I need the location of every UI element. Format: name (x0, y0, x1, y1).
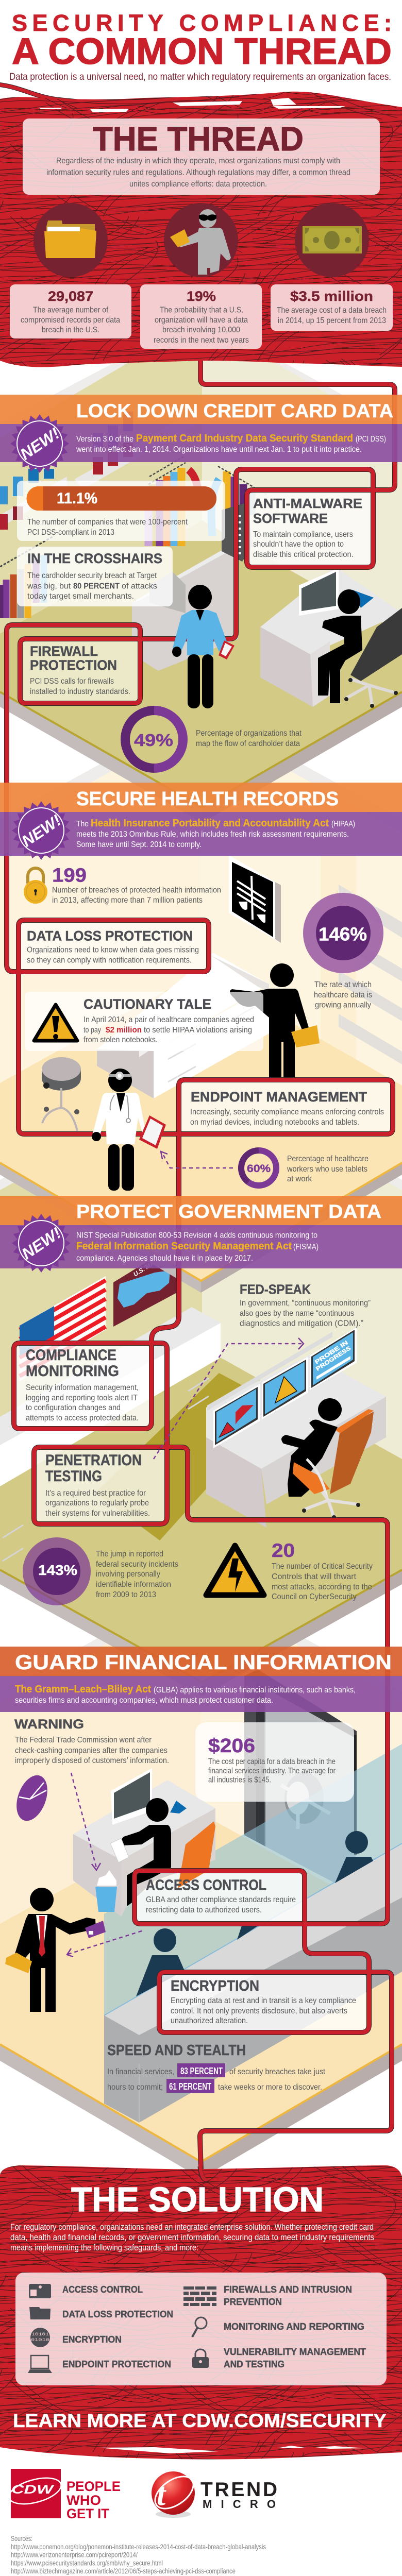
stat: 146 percent circle: The rate at which (314, 980, 372, 989)
section banner: guard financial information (0, 1647, 402, 1712)
label: endpoint protection: ENDPOINT PROTECTION (62, 2359, 171, 2369)
text: in the crosshairs: 80 PERCENT (73, 582, 120, 591)
monitor: probe in progress: PROGRESS (315, 1345, 352, 1372)
text: data loss protection (27, 928, 199, 964)
text: access control (146, 1877, 296, 1914)
stat card: records per breach: 29,087 (48, 289, 93, 304)
text: anti-malware software: shouldn’t have the option to (253, 540, 344, 549)
text: compliance monitoring: MONITORING (26, 1363, 119, 1380)
text: cautionary tale: CAUTIONARY TALE (83, 996, 211, 1012)
icon: gold lock (24, 868, 47, 904)
label: monitoring: MONITORING AND REPORTING (224, 2321, 364, 2332)
vault (244, 1669, 357, 1883)
text: penetration testing: It’s a required best practice for (45, 1489, 146, 1498)
label: firewalls (224, 2284, 352, 2307)
text: compliance monitoring: attempts to access protected data. (26, 1414, 139, 1422)
text: access control: ACCESS CONTROL (146, 1877, 266, 1894)
title (12, 10, 392, 72)
doctor with tablet (92, 1069, 166, 1191)
text: tablets at work: workers who use tablets (287, 1165, 367, 1174)
panel: the thread (23, 118, 380, 195)
sources (11, 2535, 334, 2576)
chart: 49 percent donut: 49% (134, 731, 173, 750)
chart: 49 percent donut (125, 710, 183, 768)
regulation text: securities firms and accounting companies, which must protect customer data. (15, 1696, 273, 1705)
title: A COMMON THREAD (12, 31, 392, 72)
text: anti-malware software: To maintain compliance, users (253, 530, 353, 539)
seated employee (110, 1798, 171, 1906)
text: penetration testing: their systems for vulnerabilities. (45, 1509, 150, 1518)
text: anti-malware software: ANTI-MALWARE (253, 496, 362, 511)
monitor: probe in progress (310, 1327, 357, 1390)
stat: 20 critical controls: Controls that will thwart (272, 1572, 357, 1581)
the thread: red rope through all sections (7, 358, 395, 2179)
logo: Trend Micro: t (157, 2477, 166, 2512)
regulation text: The Gramm–Leach–Bliley Act (15, 1684, 151, 1695)
stat card: cost of breach: $3.5 million (290, 289, 373, 304)
room: financial background (0, 1581, 402, 2178)
regulation text: (HIPAA) (331, 820, 355, 828)
text: compliance monitoring: Security information management, (26, 1383, 139, 1392)
seated analyst and orange chair (281, 1398, 374, 1519)
text: penetration testing (45, 1452, 150, 1518)
regulation text: Federal Information Security Management Act (76, 1241, 292, 1252)
text: firewall protection: FIREWALL (30, 643, 98, 659)
badge: new (12, 1214, 71, 1273)
text: federal incidents: involving personally (96, 1570, 160, 1579)
office desk and worker (260, 567, 402, 708)
icon: brick wall (183, 2286, 216, 2306)
stat: 199 breaches: 199 (52, 865, 87, 886)
text: compliance monitoring (26, 1347, 139, 1422)
label: firewalls: PREVENTION (224, 2297, 282, 2307)
text: firewall protection: PROTECTION (30, 657, 117, 673)
icon: dollar bill in circle (295, 203, 369, 277)
text: cardholder data map (196, 729, 301, 748)
stat card: breach probability: records in the next two years (154, 336, 249, 345)
text: solution intro: means implementing the following safeguards, and more: (10, 2243, 198, 2252)
label: encryption: ENCRYPTION (62, 2334, 122, 2345)
regulation text: Version 3.0 of the (76, 435, 133, 444)
stat: 20 critical controls: most attacks, according to the (272, 1583, 372, 1591)
arrow: warning to trash (71, 1773, 100, 1870)
top red thread mass (0, 84, 402, 367)
regulation text (76, 1231, 319, 1263)
arrow: donut to tablet (161, 1151, 233, 1168)
text: federal incidents: federal security incidents (96, 1560, 178, 1569)
regulation text: went into effect Jan. 1, 2014. Organizations have until next Jan. 1 to put it into practice. (76, 445, 362, 454)
map of the US (113, 1252, 178, 1327)
stat: 20 critical controls: 20 (272, 1540, 295, 1561)
regulation text: (FISMA) (293, 1243, 319, 1251)
monitor: lightning warning (262, 1357, 308, 1419)
stat: 199 breaches (52, 865, 221, 905)
text: warning: WARNING (14, 1717, 84, 1732)
icon: access card (29, 2284, 51, 2298)
stat: 146 percent circle: healthcare data is (314, 991, 372, 999)
logo: Trend Micro: MICRO (203, 2498, 276, 2511)
stat: 206 dollars per capita: all industries is $145. (208, 1775, 271, 1785)
badge: new: NEW! (19, 1224, 64, 1263)
regulation text: Payment Card Industry Data Security Standard (136, 433, 353, 444)
text: in the crosshairs: of attacks (122, 582, 157, 591)
text: endpoint management: on myriad devices, including notebooks and tablets. (190, 1118, 359, 1127)
text: compliance monitoring: logging and reporting tools alert IT (26, 1394, 138, 1402)
room: credit card background (0, 317, 402, 823)
stat: 143 percent circle: 143% (38, 1562, 77, 1578)
text: access control: restricting data to authorized users. (146, 1906, 262, 1914)
text: tablets at work: at work (287, 1175, 312, 1183)
stat: 20 critical controls (272, 1540, 373, 1601)
stat card: records per breach: breach in the U.S. (42, 326, 99, 334)
text: data loss protection: DATA LOSS PROTECTION (27, 928, 193, 944)
sources: https://www.pcisecuritystandards.org/smb/why_secure.html (11, 2559, 163, 2567)
heading: SECURE HEALTH RECORDS (76, 788, 339, 810)
stat card: cost of breach: The average cost of a data breach (277, 306, 387, 315)
badge: new: NEW! (17, 424, 63, 463)
logo: CDW: GET IT (66, 2506, 109, 2521)
panel: safeguards list (15, 2273, 387, 2385)
tag: 61 percent (166, 2079, 214, 2093)
person in blue shirt with tablet (172, 585, 234, 708)
logo: Trend Micro: TREND (200, 2479, 277, 2501)
regulation text: (PCI DSS) (356, 435, 386, 444)
icon: folder in circle (34, 203, 108, 277)
sources: http://www.ponemon.org/blog/ponemon-institute-releases-2014-cost-of-data-breach-global-analysis (11, 2543, 266, 2551)
label: data loss protection: DATA LOSS PROTECTION (62, 2309, 173, 2319)
monitor: probe in progress: PROBE IN (314, 1340, 349, 1366)
icon: binary circle: 01010 (31, 2338, 49, 2343)
text: anti-malware software: SOFTWARE (253, 511, 328, 526)
section: financial office scene (11, 1768, 215, 1957)
text: warning (14, 1717, 169, 1765)
stat: 146 percent circle: growing annually (315, 1001, 371, 1010)
intro text (46, 157, 350, 189)
label: vulnerability: VULNERABILITY MANAGEMENT (224, 2347, 366, 2357)
text: speed and stealth: In financial services, (107, 2067, 174, 2076)
regulation text (76, 818, 355, 849)
label: vulnerability (224, 2347, 366, 2369)
intro text: information security rules and regulations. Although regulations may differ, a common thread (46, 168, 350, 177)
rack: lower left (0, 555, 44, 618)
label: firewalls: FIREWALLS AND INTRUSION (224, 2284, 352, 2295)
badge: new: NEW! (19, 811, 64, 850)
text: encryption (171, 1978, 356, 2025)
room: health background (0, 708, 402, 1293)
silhouette: people behind glass (136, 1831, 373, 1996)
regulation text: meets the 2013 Omnibus Rule, which includes fresh risk assessment requirements. (76, 830, 349, 839)
text: encryption: unauthorized alteration. (171, 2016, 248, 2025)
sources: http://www.verizonenterprise.com/pcireport/2014/ (11, 2551, 138, 2559)
heading: PROTECT GOVERNMENT DATA (76, 1201, 381, 1222)
x-ray on wall (229, 855, 281, 943)
heading: the solution: THE SOLUTION (71, 2180, 324, 2219)
arrow: to badge (67, 1931, 142, 1957)
stat: 206 dollars per capita: The cost per capita for a data breach in the (208, 1757, 336, 1766)
label: vulnerability: AND TESTING (224, 2359, 284, 2369)
rack: center (148, 468, 252, 546)
stat card: breach probability: The probability that a U.S. (160, 306, 243, 314)
text: in the crosshairs (27, 551, 162, 601)
text: in the crosshairs: IN THE CROSSHAIRS (27, 551, 162, 566)
text: tablets at work (287, 1155, 368, 1183)
chart: 60 percent donut (241, 1150, 276, 1185)
text: firewall protection: PCI DSS calls for firewalls (30, 677, 114, 686)
text: encryption: ENCRYPTION (171, 1978, 259, 1994)
icon: folder (29, 2307, 51, 2319)
text: fed-speak: also goes by the name “continuous (240, 1309, 354, 1318)
icon: magnifier (192, 2317, 207, 2337)
stat: 143 percent circle (23, 1537, 91, 1605)
stat: 206 dollars per capita: $206 (208, 1735, 255, 1757)
clock (11, 1771, 53, 1825)
logo: CDW: CDW (11, 2483, 55, 2497)
regulation text: Health Insurance Portability and Accountability Act (91, 818, 329, 829)
stat: 11.1 percent compliant bar: PCI DSS-compliant in 2013 (27, 528, 114, 537)
title: SECURITY COMPLIANCE: (12, 10, 392, 36)
icon: binary circle (30, 2328, 50, 2347)
badge: new (12, 801, 71, 860)
text: penetration testing: TESTING (45, 1468, 102, 1485)
logo: CDW (6, 2469, 121, 2521)
stat card: records per breach: compromised records per data (21, 316, 120, 325)
trash can (95, 1870, 117, 1912)
stat: 11.1 percent compliant bar: 11.1% (57, 490, 97, 507)
stat card: breach probability (140, 284, 262, 349)
section banner: protect government data (0, 1196, 402, 1268)
text: encryption: control. It not only prevents disclosure, but also averts (171, 2007, 347, 2015)
regulation text: (GLBA) applies to various financial institutions, such as banks, (154, 1686, 356, 1694)
regulation text: compliance. Agencies should have it in place by 2017. (76, 1254, 253, 1263)
icon: warning triangle (34, 1005, 77, 1041)
text: warning: improperly disposed of customers’ information. (15, 1756, 169, 1765)
text: firewall protection: installed to industry standards. (30, 687, 130, 696)
logo: CDW: PEOPLE (66, 2479, 121, 2494)
icon: binary circle: 10101 (31, 2332, 49, 2337)
bottom red thread mass (0, 2164, 402, 2460)
flag (20, 1276, 106, 1381)
text: cautionary tale: to settle HIPAA violations arising (144, 1026, 252, 1035)
text: cautionary tale (83, 996, 254, 1044)
text: solution intro (10, 2222, 374, 2252)
text: cardholder data map: map the flow of cardholder data (196, 739, 300, 748)
intro text: Regardless of the industry in which they operate, most organizations must comply with (56, 157, 340, 165)
businessman with badge and folder (5, 1888, 106, 2012)
stat: 199 breaches: Number of breaches of protected health information (52, 886, 221, 894)
translucent text panels (16, 481, 391, 2030)
text: access control: GLBA and other compliance standards require (146, 1895, 296, 1904)
stat: 206 dollars per capita: financial services industry. The average for (208, 1767, 336, 1775)
sources: http://www.biztechmagazine.com/article/2012/06/5-steps-achieving-pci-dss-compliance (11, 2567, 236, 2575)
icon: padlock (192, 2349, 209, 2368)
icon: laptop (28, 2355, 52, 2373)
text: warning: check-cashing companies after the companies (15, 1747, 167, 1755)
badge: new (10, 414, 69, 473)
stat card: cost of breach: in 2014, up 15 percent from 2013 (278, 316, 386, 325)
text: firewall protection (30, 643, 130, 696)
icon: lightning warning triangle (206, 1546, 264, 1595)
text: data loss protection: so they can comply with notification requirements. (27, 956, 192, 964)
regulation text: NIST Special Publication 800-53 Revision 4 adds continuous monitoring to (76, 1231, 317, 1240)
stat card: breach probability: breach involving 10,000 (162, 326, 240, 334)
stat: 20 critical controls: Council on CyberSecurity (272, 1592, 357, 1601)
stat: 146 percent circle (303, 893, 383, 1010)
orange chair (178, 1821, 215, 1888)
section banner: secure health records (0, 783, 402, 856)
text: cautionary tale: In April 2014, a pair of healthcare companies agreed (83, 1015, 254, 1024)
text: endpoint management: ENDPOINT MANAGEMENT (191, 1089, 367, 1105)
label: access control: ACCESS CONTROL (62, 2284, 143, 2295)
text: fed-speak: diagnostics and mitigation (CDM).” (240, 1319, 363, 1328)
text: speed and stealth (107, 2042, 325, 2093)
tag: 83 percent (177, 2063, 225, 2077)
heading: GUARD FINANCIAL INFORMATION (15, 1651, 392, 1674)
text: federal incidents: identifiable information (96, 1580, 171, 1589)
tag: 61 percent: 61 PERCENT (169, 2081, 211, 2092)
text: speed and stealth: SPEED AND STEALTH (107, 2042, 246, 2059)
text: federal incidents: from 2009 to 2013 (96, 1590, 156, 1599)
text: anti-malware software: disable this critical protection. (253, 550, 354, 559)
regulation text: Some have until Sept. 2014 to comply. (76, 840, 202, 849)
stat card: records per breach: The average number of (33, 306, 108, 314)
room: government background (0, 1069, 402, 1696)
heading: LOCK DOWN CREDIT CARD DATA (76, 400, 393, 421)
text: anti-malware software (253, 496, 362, 559)
text: in the crosshairs: was big, but (27, 582, 71, 591)
text: compliance monitoring: COMPLIANCE (26, 1347, 116, 1364)
desk with computer (73, 1768, 215, 1917)
chart: 60 percent donut: 60% (247, 1163, 271, 1175)
text: endpoint management: Increasingly, security compliance means enforcing controls (190, 1108, 384, 1116)
desk with three monitors (206, 1327, 386, 1528)
clothing racks (0, 456, 266, 618)
arrow: penetration testing to monitors (154, 1338, 304, 1459)
text: in the crosshairs: The cardholder security breach at Target (27, 571, 157, 580)
text: encryption: Encrypting data at rest and in transit is a key compliance (171, 1996, 356, 2005)
map of the US: U.S. MAP (132, 1257, 160, 1278)
regulation text (76, 433, 386, 454)
person holding folder (230, 963, 320, 1082)
intro text: unites compliance efforts: data protection. (129, 180, 267, 189)
regulation text (15, 1684, 356, 1705)
call to action: LEARN MORE AT CDW.COM/SECURITY (13, 2410, 387, 2431)
stat card: cost of breach (271, 284, 393, 331)
text: speed and stealth: take weeks or more to discover. (218, 2083, 322, 2092)
regulation text: The (76, 820, 89, 828)
sources: Sources: (11, 2535, 32, 2543)
stat: 146 percent circle: 146% (319, 923, 367, 945)
stat card: records per breach (10, 284, 131, 338)
icon: masked thief in circle (164, 203, 238, 277)
text: tablets at work: Percentage of healthcare (287, 1155, 368, 1163)
store shelves with product bars (0, 407, 201, 530)
text: fed-speak: FED-SPEAK (240, 1282, 311, 1297)
tag: 83 percent: 83 PERCENT (180, 2066, 223, 2076)
stool (42, 1057, 81, 1131)
heading: the thread: THE THREAD (93, 120, 304, 158)
text: cautionary tale: $2 million (106, 1026, 142, 1035)
text: speed and stealth: hours to commit; (107, 2083, 163, 2092)
monitor: warning and house (213, 1384, 260, 1448)
text: warning: The Federal Trade Commission went after (15, 1736, 152, 1744)
text: data loss protection: Organizations need to know when data goes missing (27, 946, 199, 954)
stat: 199 breaches: in 2013, affecting more than 7 million patients (52, 896, 203, 905)
text: cautionary tale: from stolen notebooks. (83, 1036, 158, 1044)
stat: 20 critical controls: The number of Critical Security (272, 1562, 373, 1571)
section banner: lock down credit card data (0, 395, 402, 462)
stat: 206 dollars per capita (208, 1735, 336, 1785)
text: federal incidents (96, 1550, 178, 1599)
text: cautionary tale: to pay (83, 1026, 101, 1035)
text: cardholder data map: Percentage of organizations that (196, 729, 301, 738)
text: penetration testing: organizations to regularly probe (45, 1499, 149, 1507)
text: federal incidents: The jump in reported (96, 1550, 163, 1558)
text: fed-speak (240, 1282, 371, 1328)
cabinet: exam room (97, 953, 269, 1098)
logo: Trend Micro (149, 2470, 277, 2518)
text: fed-speak: In government, “continuous monitoring” (240, 1299, 371, 1308)
stat: 11.1 percent compliant bar: The number of companies that were 100-percent (27, 518, 188, 527)
stat card: breach probability: 19% (187, 289, 216, 304)
text: in the crosshairs: today target small merchants. (27, 592, 134, 601)
logo: CDW: WHO (66, 2493, 101, 2508)
text: compliance monitoring: to configuration changes and (26, 1403, 121, 1412)
counter and register (132, 502, 253, 671)
cabinet: long white counter (0, 1307, 221, 1561)
text: speed and stealth: of security breaches take just (229, 2067, 325, 2076)
glass wall (104, 1744, 402, 2015)
stat card: breach probability: organization will have a data (155, 316, 248, 325)
text: endpoint management (190, 1089, 384, 1127)
stat: 11.1 percent compliant bar (26, 486, 216, 537)
text: penetration testing: PENETRATION (45, 1452, 142, 1469)
